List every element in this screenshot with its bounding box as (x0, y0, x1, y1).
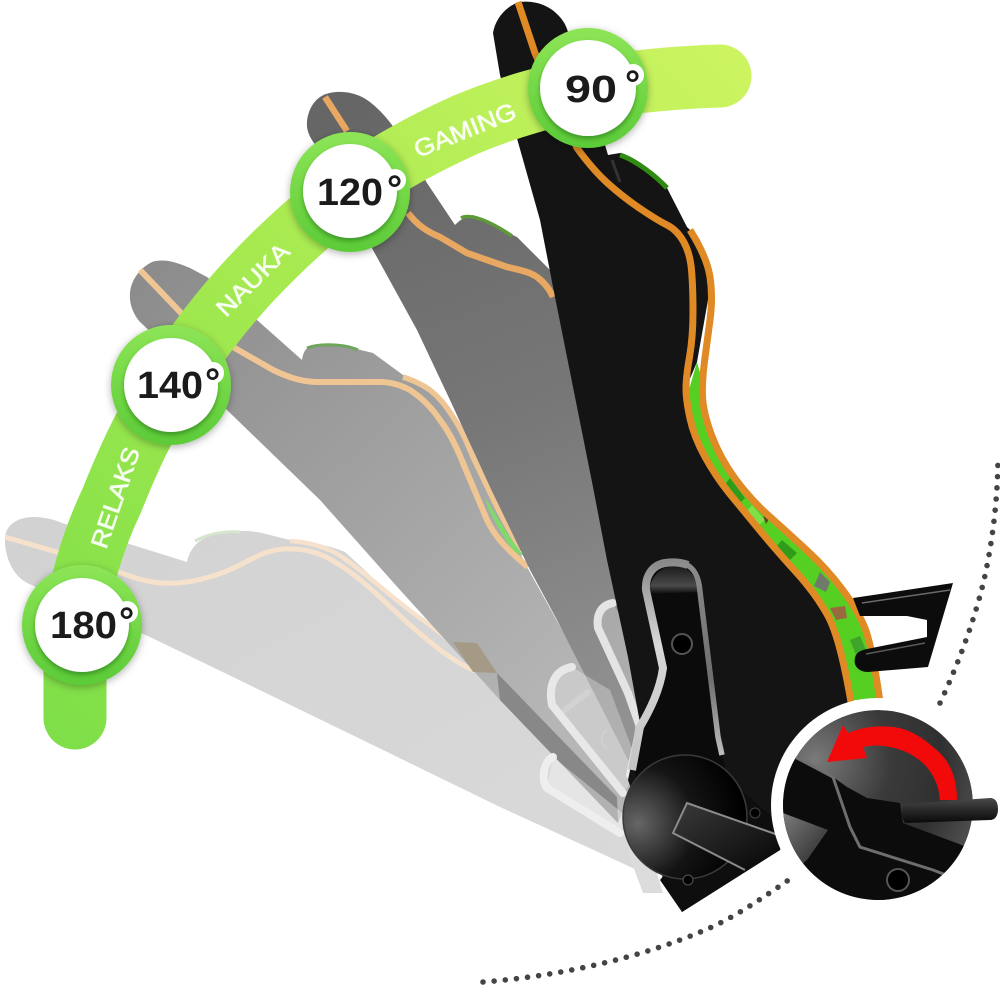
bracket (783, 758, 964, 900)
bracket right rim (685, 564, 722, 755)
label: RELAKS: RELAKS (86, 444, 146, 552)
badge: 90 degrees: 90 (565, 69, 617, 111)
badge: 180 degrees: ° (119, 601, 134, 643)
lever slot (673, 803, 782, 870)
badge: 90 degrees: ° (625, 64, 640, 106)
ghost chair: 120 degrees (307, 92, 640, 770)
green adjustment band (75, 76, 720, 718)
recline bracket and pivot (623, 562, 782, 912)
inner orange piping (518, 2, 851, 702)
screws (683, 875, 693, 885)
badge: 140 degrees: ° (205, 362, 220, 404)
handle (902, 798, 998, 823)
label: GAMING: GAMING (410, 98, 520, 164)
lower frame (660, 785, 782, 912)
badge: 120 degrees: 120 (317, 172, 383, 214)
red arrow (827, 725, 957, 800)
dark lower strip (497, 673, 618, 823)
hole (887, 869, 909, 891)
pillow green trim (620, 155, 667, 188)
gray block (783, 813, 828, 864)
label: NAUKA: NAUKA (211, 238, 295, 322)
bracket left rim (632, 562, 688, 770)
badge: 120 degrees: ° (387, 169, 402, 211)
green stripe (686, 362, 880, 700)
badge: 140 degrees (111, 325, 231, 445)
seat arm bars (853, 583, 953, 672)
badge: 140 degrees: 140 (137, 365, 203, 407)
main chair: 90 degrees (493, 2, 880, 912)
outer orange piping (690, 230, 880, 702)
pivot disc (623, 755, 747, 879)
badge: 90 degrees (528, 28, 648, 148)
seat remnant under ghost (453, 642, 497, 673)
stripe pattern (724, 478, 868, 660)
badge: 120 degrees (290, 132, 410, 252)
hole (672, 634, 692, 654)
dotted arc (483, 455, 998, 982)
ghost backrest brackets (544, 603, 663, 893)
badge: 180 degrees (22, 565, 142, 685)
ghost chair: 140 degrees (130, 261, 640, 823)
detail inset (770, 698, 998, 912)
bracket cap (649, 566, 698, 594)
badge: 180 degrees: 180 (50, 605, 117, 647)
black backrest (493, 2, 851, 912)
ghost chair: 180 degrees (5, 517, 640, 870)
